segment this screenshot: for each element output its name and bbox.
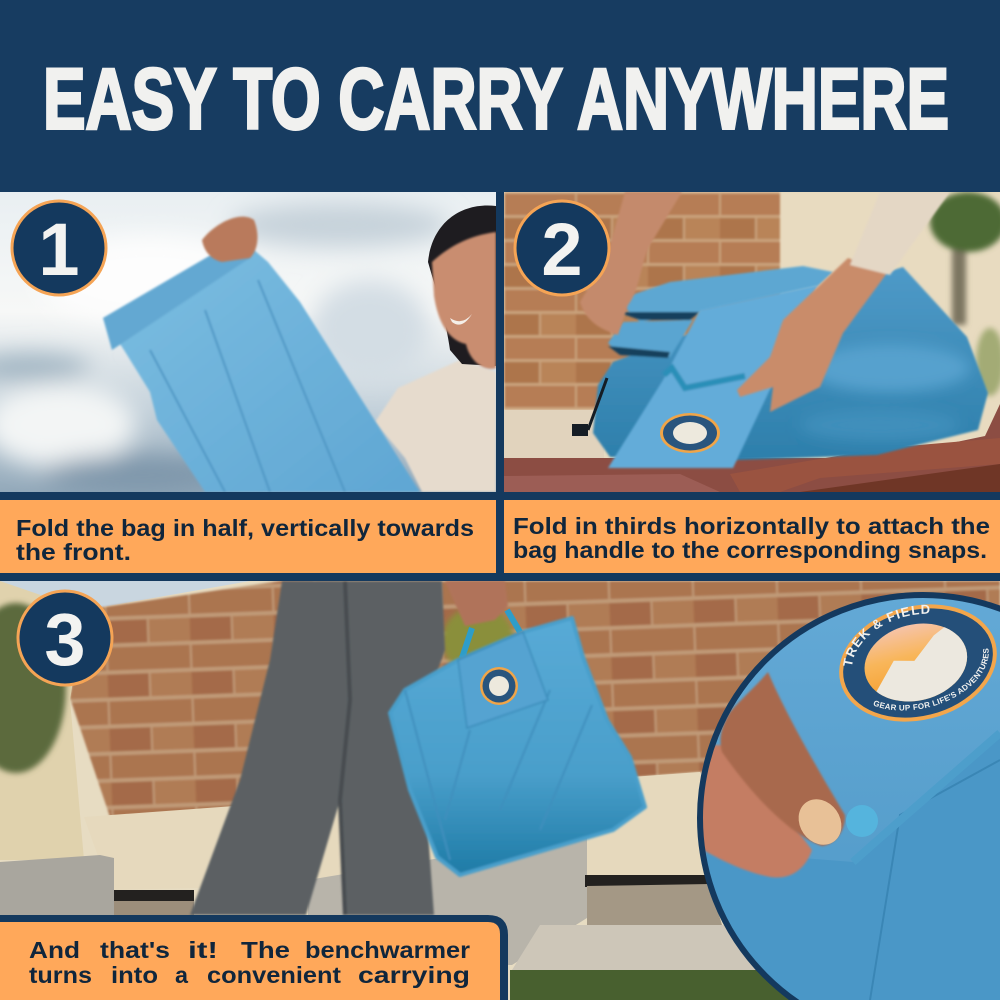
step badge 3 bbox=[18, 591, 112, 685]
foreground planter left bbox=[0, 855, 114, 915]
bag handle bbox=[462, 610, 520, 658]
caption: step 2: bag handle to the corresponding snaps. bbox=[513, 537, 987, 563]
tree bbox=[930, 192, 1000, 396]
hand holding bag bbox=[202, 217, 257, 262]
caption: step 2: Fold in thirds horizontally to attach the bbox=[513, 513, 990, 539]
shrub behind bag bbox=[444, 610, 516, 662]
caption: step 3: a bbox=[175, 962, 188, 988]
small badge bbox=[660, 413, 720, 453]
step badge 2 bbox=[515, 201, 609, 295]
step badge 2: 2 bbox=[541, 208, 583, 291]
caption: step 1 bbox=[0, 500, 496, 573]
grass bbox=[510, 970, 810, 1000]
caption: step 3: And bbox=[29, 937, 80, 963]
pavement bbox=[512, 925, 760, 970]
caption: step 3: it! bbox=[188, 937, 218, 963]
thumbnail bbox=[798, 799, 842, 845]
patch badge bbox=[839, 604, 997, 722]
tree bbox=[0, 603, 66, 773]
caption: step 3: benchwarmer bbox=[305, 937, 470, 963]
caption: step 1: the front. bbox=[16, 539, 131, 565]
caption: step 3: that's bbox=[100, 937, 170, 963]
panel: step 1 photo bbox=[0, 192, 496, 495]
inset: snap close-up bbox=[697, 592, 1000, 1000]
carried bag bbox=[390, 618, 645, 875]
patch badge: GEAR UP FOR LIFE'S ADVENTURES bbox=[874, 648, 989, 711]
bag handle flap bbox=[608, 285, 818, 468]
caption: step 3: into bbox=[111, 962, 158, 988]
panel: step 2 photo bbox=[504, 192, 1000, 492]
bag flap bbox=[458, 632, 548, 728]
smile bbox=[450, 314, 472, 325]
panel: step 3 photo bbox=[0, 581, 1000, 1000]
flap hem bbox=[853, 733, 1000, 862]
bag badge bbox=[480, 667, 518, 705]
snap button bbox=[846, 805, 878, 837]
pebbles bbox=[585, 875, 710, 887]
thumb bbox=[720, 672, 845, 846]
concrete planter bbox=[308, 838, 587, 965]
cord toggle bbox=[588, 378, 607, 430]
caption: step 2 bbox=[504, 500, 1000, 573]
fingers bbox=[700, 745, 812, 878]
carried hand bbox=[445, 581, 508, 626]
lower fabric bbox=[706, 738, 1000, 938]
caption: step 3: carrying bbox=[358, 962, 470, 988]
caption: step 1: Fold the bag in half, vertically towards bbox=[16, 515, 474, 541]
step badge 1: 1 bbox=[38, 208, 80, 291]
caption: step 3: turns bbox=[29, 962, 92, 988]
toggle lock bbox=[572, 424, 588, 436]
caption: step 3: The bbox=[241, 937, 290, 963]
caption: step 3 bbox=[0, 915, 508, 1000]
brick wall bbox=[70, 581, 1000, 817]
hair bbox=[428, 205, 496, 366]
face bbox=[432, 232, 496, 369]
bench bbox=[504, 404, 1000, 492]
trousers bbox=[190, 581, 445, 915]
inset ring bbox=[700, 595, 1000, 1000]
step badge 3: 3 bbox=[44, 598, 86, 681]
patch badge: TREK & FIELD bbox=[843, 604, 930, 666]
sweater bbox=[375, 360, 496, 492]
hands and arm bbox=[580, 192, 950, 412]
folded bag bbox=[103, 238, 420, 492]
caption: step 3: convenient bbox=[207, 962, 341, 988]
lower wall bbox=[108, 772, 700, 818]
folded bag body bbox=[593, 266, 988, 460]
step badge 1 bbox=[12, 201, 106, 295]
